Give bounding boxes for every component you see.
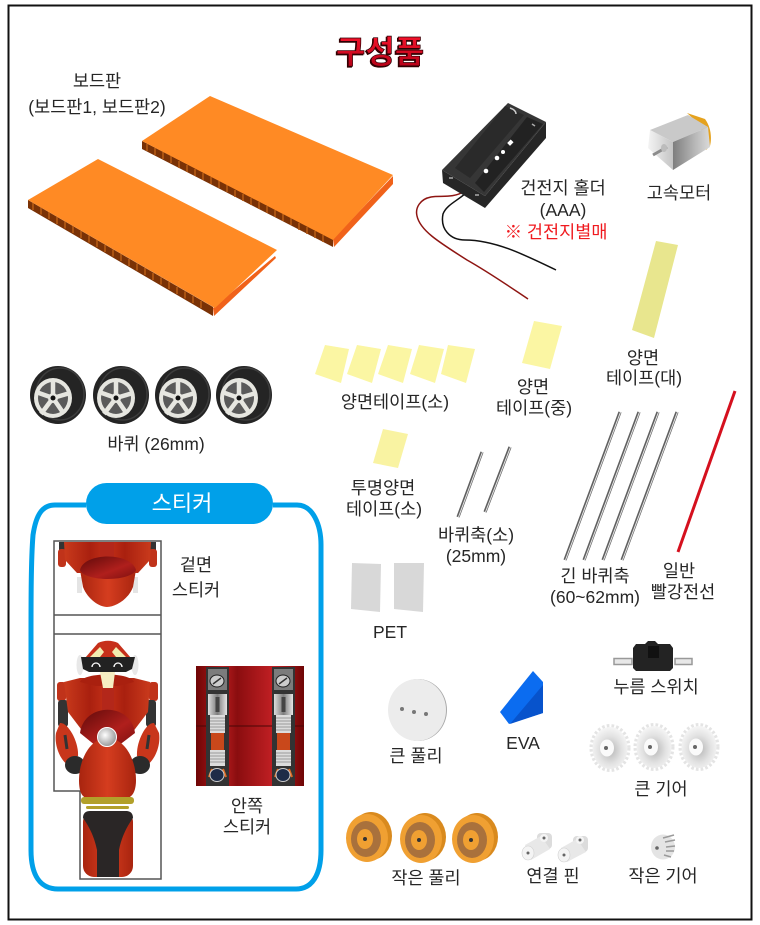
label: short axles — [438, 525, 514, 566]
robot wheel — [83, 811, 133, 877]
label: long axles — [550, 566, 640, 607]
label: transparent tape — [346, 478, 422, 519]
label: medium tape: 양면 — [517, 377, 549, 397]
label: transparent tape: 투명양면 — [351, 478, 415, 498]
label: red wire: 일반 — [663, 561, 695, 581]
label: short axles: 바퀴축(소) — [438, 525, 514, 545]
icon: upper orange board — [142, 96, 393, 247]
icon: lower orange board — [28, 159, 277, 316]
label: outer sticker: 겉면 — [180, 555, 212, 575]
robot chest — [80, 672, 135, 746]
label: medium tape — [496, 377, 572, 418]
label: transparent tape: 테이프(소) — [346, 499, 422, 519]
label: large tape: 양면 — [627, 348, 659, 368]
icon: small gear — [651, 834, 675, 860]
inner sticker — [196, 666, 304, 786]
icon: long axles — [565, 412, 678, 560]
icon: large pulley — [388, 679, 447, 741]
label: large gears: 큰 기어 — [634, 779, 688, 799]
icon: EVA wedge — [500, 671, 543, 724]
icon: red wire — [678, 391, 735, 552]
label: outer sticker — [172, 555, 220, 600]
label: battery holder — [505, 178, 607, 242]
icon: small tapes — [315, 345, 475, 383]
icon: transparent tape — [373, 429, 408, 468]
outer sticker: upper piece — [58, 542, 157, 607]
outer sticker: robot — [56, 641, 159, 877]
robot body — [79, 738, 136, 798]
panel heading pill — [86, 483, 273, 524]
label: small gear: 작은 기어 — [628, 866, 698, 886]
label: battery holder: 건전지 홀더 — [520, 178, 606, 198]
icon: connecting pins — [522, 833, 588, 862]
robot chest orb — [98, 728, 116, 746]
label: wheels: 바퀴 (26mm) — [107, 434, 205, 454]
panel outline — [31, 505, 321, 889]
label: small tape: 양면테이프(소) — [341, 392, 449, 412]
title: 구성품 — [336, 34, 424, 70]
icon: PET sheets — [351, 563, 424, 612]
icon: short axles — [458, 447, 510, 517]
inner strip: left — [206, 667, 229, 786]
robot arms — [56, 682, 159, 774]
panel: stickers — [31, 483, 321, 889]
inner strip: right — [272, 667, 295, 786]
icon: medium tape — [522, 321, 562, 369]
label: push switch: 누름 스위치 — [613, 677, 699, 697]
label: battery holder: ※ 건전지별매 — [505, 222, 607, 242]
label: large tape: 테이프(대) — [606, 368, 682, 388]
label: board: (보드판1, 보드판2) — [28, 97, 166, 117]
icon: push switch — [614, 641, 692, 671]
label: connecting pins: 연결 핀 — [526, 866, 580, 886]
label: red wire — [651, 561, 715, 602]
robot torso — [64, 678, 150, 733]
robot head — [76, 641, 138, 675]
label: long axles: (60~62mm) — [550, 587, 640, 607]
label: red wire: 빨강전선 — [651, 582, 715, 602]
label: battery holder: (AAA) — [540, 200, 586, 220]
label: motor: 고속모터 — [647, 183, 711, 203]
icon: large gears — [592, 726, 717, 770]
label: board: 보드판 — [73, 71, 121, 91]
label: long axles: 긴 바퀴축 — [560, 566, 630, 586]
icon: battery holder — [417, 103, 556, 299]
label: inner sticker: 스티커 — [223, 817, 271, 837]
robot rings — [81, 797, 134, 809]
icon: large tape — [632, 241, 678, 338]
label: board — [28, 71, 166, 117]
icon: motor — [648, 113, 711, 170]
label: large tape — [606, 348, 682, 388]
label: inner sticker — [223, 796, 271, 837]
label: outer sticker: 스티커 — [172, 580, 220, 600]
label: PET: PET — [373, 622, 407, 642]
label: inner sticker: 안쪽 — [231, 796, 263, 816]
icon: small pulleys — [346, 812, 498, 863]
icon: wheels — [30, 366, 272, 424]
label: EVA: EVA — [506, 733, 540, 753]
label: small pulleys: 작은 풀리 — [391, 868, 461, 888]
sticker die-line — [54, 541, 161, 879]
label: medium tape: 테이프(중) — [496, 398, 572, 418]
panel heading pill: 스티커 — [152, 491, 212, 516]
label: short axles: (25mm) — [446, 546, 506, 566]
label: large pulley: 큰 풀리 — [389, 746, 443, 766]
